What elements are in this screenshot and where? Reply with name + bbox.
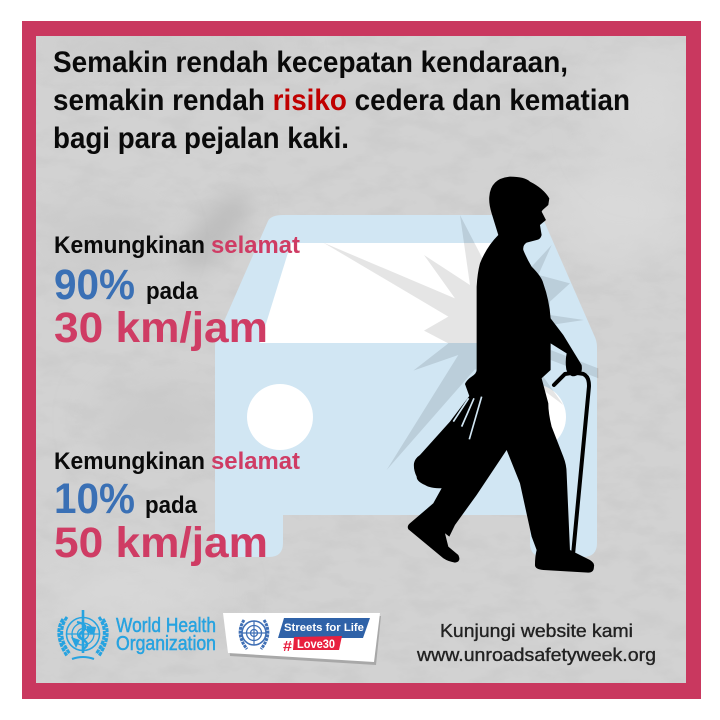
banner: #Love30	[283, 636, 342, 655]
icon: car	[215, 215, 597, 557]
illustration: car with crash burst and pedestrian	[215, 177, 598, 573]
statistic: 10% at 50 km/jam: selamat	[211, 448, 300, 475]
statistic: 10% at 50 km/jam: 50 km/jam	[54, 519, 268, 567]
statistic: 10% at 50 km/jam: pada	[145, 492, 198, 519]
title: semakin rendah risiko cedera dan kematian	[53, 84, 630, 117]
statistic: 90% at 30 km/jam: 90%	[54, 261, 135, 309]
icon: crash burst	[323, 215, 598, 470]
title: Semakin rendah kecepatan kendaraan,	[53, 46, 568, 79]
banner: #Love30: Love30	[297, 639, 335, 651]
statistic: 10% at 50 km/jam: 10%	[54, 475, 135, 523]
logo: Streets for Life #Love30	[223, 613, 381, 665]
cane	[554, 373, 589, 552]
logo: World Health Organization: Organization	[116, 633, 216, 655]
bag handle gaps	[453, 397, 482, 439]
statistic: 90% at 30 km/jam: 30 km/jam	[54, 304, 268, 352]
website call to action	[416, 621, 656, 665]
statistic: 10% at 50 km/jam	[54, 448, 300, 567]
icon: WHO emblem	[59, 610, 107, 659]
website call to action: Kunjungi website kami	[440, 621, 633, 641]
website call to action: www.unroadsafetyweek.org	[416, 645, 656, 665]
card shadow	[226, 616, 381, 665]
logo: World Health Organization	[59, 610, 216, 659]
title	[53, 46, 630, 155]
statistic: 90% at 30 km/jam: selamat	[211, 232, 300, 259]
logo: World Health Organization: World Health	[116, 615, 216, 637]
title: bagi para pejalan kaki.	[53, 122, 349, 155]
icon: walking person silhouette	[408, 177, 594, 573]
card	[223, 613, 380, 662]
statistic: 90% at 30 km/jam	[54, 232, 300, 352]
icon: UN emblem	[240, 620, 268, 649]
statistic: 90% at 30 km/jam: Kemungkinan	[54, 232, 205, 259]
banner: Streets for Life: Streets for Life	[284, 622, 364, 634]
banner: Streets for Life	[278, 618, 370, 638]
statistic: 90% at 30 km/jam: pada	[146, 278, 199, 305]
statistic: 10% at 50 km/jam: Kemungkinan	[54, 448, 205, 475]
banner: #Love30: #	[283, 638, 293, 655]
